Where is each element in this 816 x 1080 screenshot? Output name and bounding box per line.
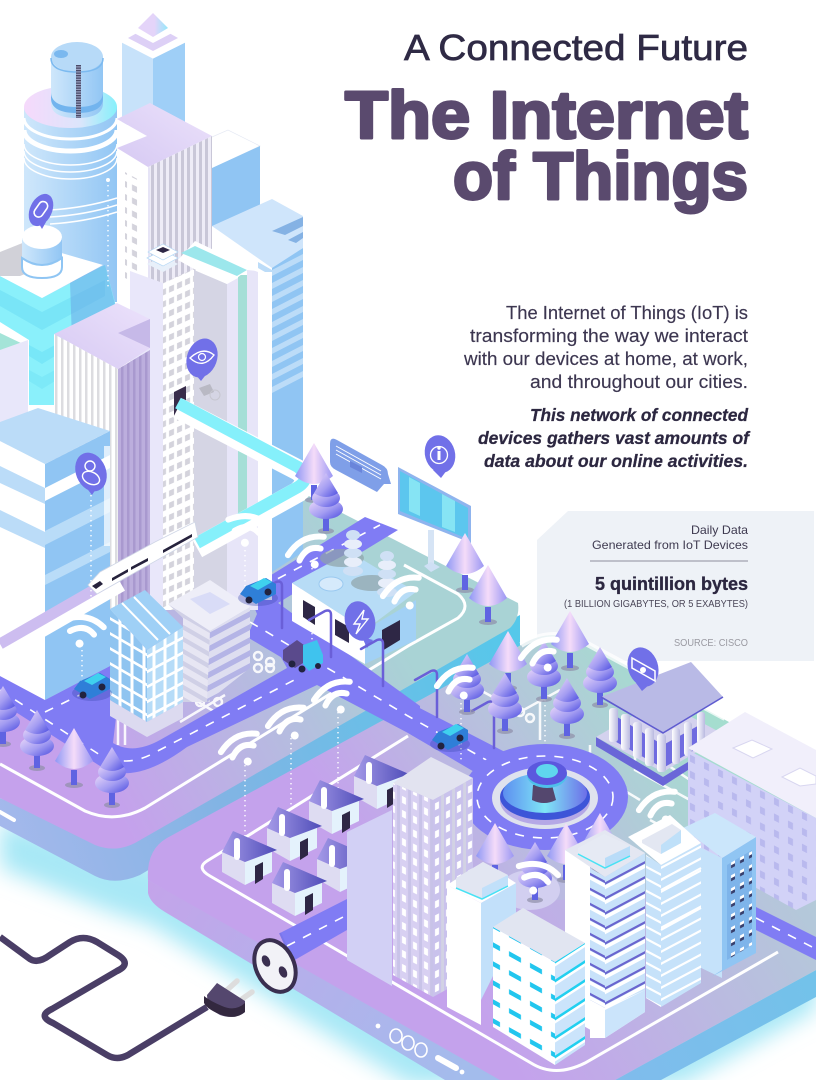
platform A: upper-left city base [0,493,520,881]
intro text: The Internet of Things (IoT) is [506,303,748,323]
elevated lilac rail [0,575,120,651]
icon: banknote bubble [623,643,663,691]
building: lilac striped tower [54,303,150,640]
elevated cyan data track [178,403,305,548]
bank [596,662,725,786]
trees: upper [295,443,507,625]
roof stack [147,244,178,272]
title: of Things [453,139,748,214]
emphasis text: devices gathers vast amounts of [478,428,751,448]
building: striped right tower [212,199,303,600]
building: white tower with cap [447,862,516,1025]
panel: daily data: Generated from IoT Devices [592,538,748,552]
panel: daily data: Daily Data [691,523,748,537]
trees: around roundabout [476,813,619,910]
title: A Connected Future [404,27,748,68]
emphasis text: This network of connected [530,405,748,425]
glow under platforms [0,820,816,1080]
intro text [463,303,748,392]
building: grey slatted block [168,580,250,702]
icon: eye bubble [181,334,223,382]
street lamps [260,582,494,748]
door and camera [174,384,220,416]
building: lilac window tower [347,757,473,997]
building: right lilac block [688,712,816,910]
fountain [492,761,598,829]
panel: daily data: 5 quintillion bytes [595,574,748,594]
building: cyan glass block with cylinder [0,225,117,445]
side markings [376,1024,464,1074]
intro text: transforming the way we interact [470,326,748,346]
truck [283,640,323,672]
building: back blue block [205,130,260,240]
vehicles [72,578,470,752]
icon: lightning bubble [340,598,380,648]
title [345,27,748,214]
panel: daily data [537,511,814,661]
roads [0,517,816,961]
train [88,522,198,594]
icon: info bubble [421,432,459,478]
wifi marker dots [106,178,110,182]
trees: right grove [450,611,617,739]
panel: daily data: (1 BILLION GIGABYTES, OR 5 EXABYTES) [564,599,748,610]
building: glass office [110,590,183,737]
building: pyramid tower [122,13,185,125]
building: cylinder tower [24,42,117,302]
emphasis text [478,405,751,471]
dotted sensor lines [82,180,545,850]
building: striped tower with cap [628,815,701,1007]
wifi icons [57,511,684,900]
socket [246,933,304,999]
emphasis text: data about our online activities. [484,451,748,471]
circuit traces [78,630,700,855]
factory [292,530,416,664]
platform B: lower-right city base [0,635,816,1080]
green plate: chat bubble [330,439,391,492]
trees: lower left [0,686,129,808]
panel: daily data: SOURCE: CISCO [674,637,748,649]
building: far-right pale blue tower [683,813,756,978]
intro text: and throughout our cities. [530,372,748,392]
building: central white tower [130,241,272,610]
power cable [0,937,207,1058]
houses [222,755,409,916]
title: The Internet [345,78,748,153]
roundabout [462,744,628,850]
plug [204,981,252,1017]
icon: bandage bubble [24,190,58,230]
building: front block with cyan windows [493,908,585,1065]
intro text: with our devices at home, at work, [463,349,748,369]
building: front-left tiered blue block [0,408,110,700]
icon: location pin bubble [70,448,112,496]
building: lilac-roof white tower [117,103,212,320]
building: tall purple-striped tower [565,830,645,1038]
billboard [398,467,471,572]
